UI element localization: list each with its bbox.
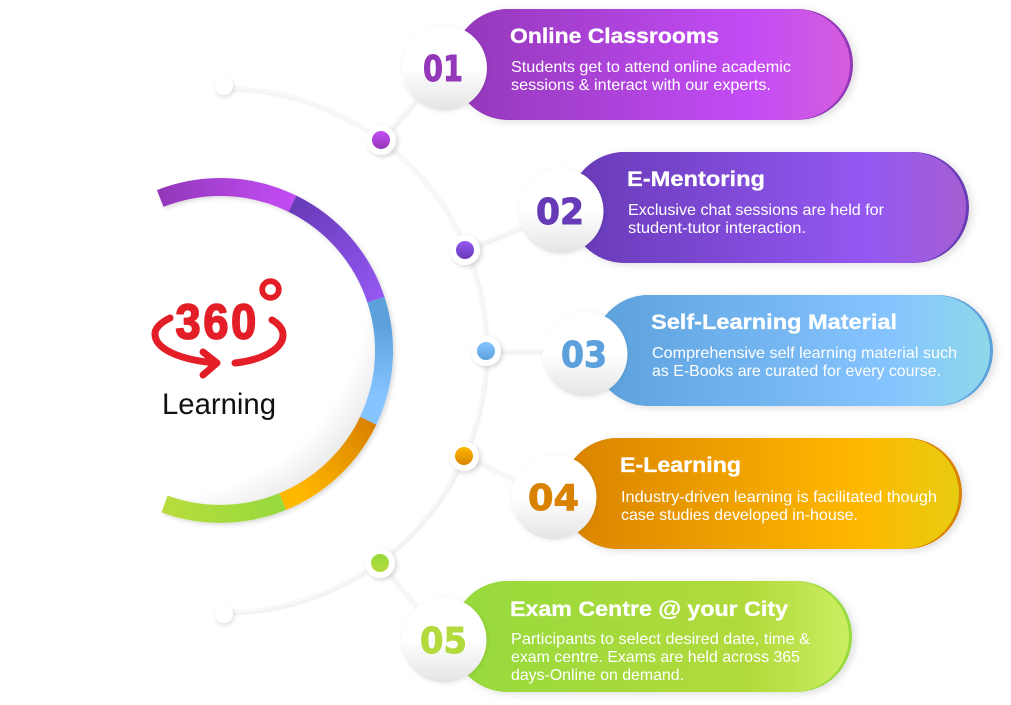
panel: 03 Self-Learning Material: 03 [561, 335, 607, 376]
panel: 02 E-Mentoring [518, 152, 969, 263]
panel: 04 E-Learning: E-Learning [620, 453, 741, 477]
panel: 01 Online Classrooms: 01 [423, 49, 463, 90]
panel: 01 Online Classrooms [402, 9, 853, 120]
panel: 03 Self-Learning Material: Comprehensive self learning material such [652, 345, 957, 362]
panel: 03 Self-Learning Material [542, 295, 993, 406]
panel: 04 E-Learning [512, 438, 962, 549]
panel: 04 E-Learning: case studies developed in-house. [621, 507, 858, 524]
panel: 05 Exam Centre @ your City: Exam Centre @ your City [510, 597, 788, 621]
panel: 04 E-Learning: 04 [528, 478, 579, 519]
panel: 01 Online Classrooms: sessions & interact with our experts. [511, 77, 771, 94]
panel: 05 Exam Centre @ your City: Participants to select desired date, time & [511, 631, 810, 648]
panel: 05 Exam Centre @ your City [402, 581, 852, 692]
heading: Learning: Learning [162, 388, 276, 421]
panel: 02 E-Mentoring: E-Mentoring [627, 167, 765, 191]
connector arc with end dots [215, 77, 486, 623]
panel: 05 Exam Centre @ your City: days-Online on demand. [511, 667, 684, 684]
panel: 02 E-Mentoring: Exclusive chat sessions are held for [628, 202, 885, 219]
branch connector lines [380, 68, 585, 640]
central disc with segmented ring [66, 187, 384, 514]
panel: 05 Exam Centre @ your City: 05 [420, 621, 467, 662]
icon: 360 degree rotation: 360 [176, 294, 259, 349]
panel: 02 E-Mentoring: student-tutor interaction. [628, 220, 806, 237]
icon: 360 degree rotation [155, 281, 283, 375]
panel: 05 Exam Centre @ your City: exam centre. Exams are held across 365 [511, 649, 800, 666]
panel: 03 Self-Learning Material: Self-Learning Material [651, 310, 897, 334]
panel: 02 E-Mentoring: 02 [536, 192, 584, 233]
panel: 04 E-Learning: Industry-driven learning is facilitated though [621, 489, 937, 506]
panel: 01 Online Classrooms: Students get to attend online academic [511, 59, 791, 76]
node dots on arc [365, 125, 501, 578]
panel: 03 Self-Learning Material: as E-Books are curated for every course. [652, 363, 941, 380]
panel: 01 Online Classrooms: Online Classrooms [510, 24, 719, 48]
